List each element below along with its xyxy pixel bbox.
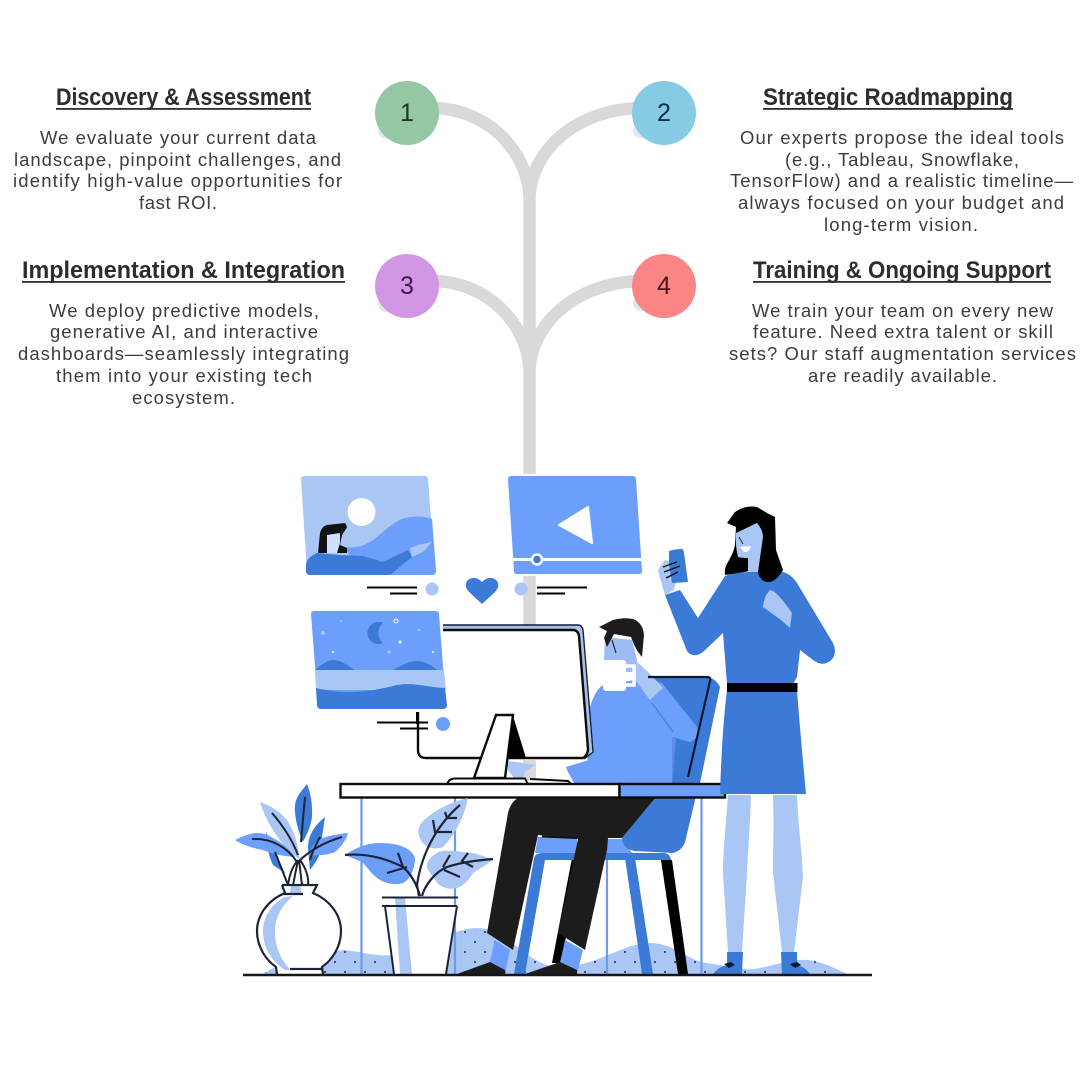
- caption marks: lower with dot: [377, 712, 450, 731]
- text block: Implementation & Integration: We deploy predictive models,: [49, 300, 319, 321]
- text block: Training & Ongoing Support: We train your team on every new: [752, 300, 1054, 321]
- text block: Implementation & Integration: them into your existing tech: [56, 365, 312, 386]
- step 1 number badge: 1: [400, 99, 414, 127]
- text block: Training & Ongoing Support: are readily available.: [808, 365, 997, 386]
- step 4 number badge: [632, 254, 696, 318]
- text block: Discovery & Assessment: Discovery & Assessment: [56, 84, 311, 111]
- text block: Strategic Roadmapping: long-term vision.: [824, 214, 978, 235]
- text block: Implementation & Integration: [18, 257, 349, 408]
- text block: Strategic Roadmapping: [730, 84, 1074, 235]
- caption marks: right with dot: [514, 582, 587, 596]
- text block: Training & Ongoing Support: [729, 257, 1076, 386]
- text block: Implementation & Integration: ecosystem.: [132, 387, 235, 408]
- text block: Implementation & Integration: Implementation & Integration: [22, 257, 345, 284]
- step 3 number badge: 3: [400, 272, 414, 300]
- illustration: desk: [340, 784, 725, 798]
- text block: Strategic Roadmapping: always focused on your budget and: [738, 192, 1064, 213]
- tree connector: [435, 108, 640, 780]
- illustration: vase plant: [235, 784, 348, 974]
- illustration: standing woman: [658, 507, 835, 974]
- text block: Implementation & Integration: dashboards—seamlessly integrating: [18, 343, 349, 364]
- video card: play button: [507, 475, 643, 575]
- step 2 number badge: [632, 81, 696, 145]
- text block: Discovery & Assessment: landscape, pinpoint challenges, and: [14, 149, 341, 170]
- illustration: monitor: [418, 625, 593, 778]
- text block: Discovery & Assessment: identify high-value opportunities for: [13, 170, 342, 191]
- night landscape card: [310, 610, 447, 709]
- icon: heart: [466, 578, 498, 604]
- text block: Strategic Roadmapping: Our experts propose the ideal tools: [740, 127, 1064, 148]
- illustration: floor line: [243, 974, 872, 976]
- illustration: chair back line: [648, 677, 710, 777]
- text block: Implementation & Integration: generative AI, and interactive: [50, 321, 318, 342]
- text block: Training & Ongoing Support: feature. Need extra talent or skill: [753, 321, 1053, 342]
- step 4 number badge: 4: [657, 272, 671, 300]
- text block: Strategic Roadmapping: Strategic Roadmapping: [763, 84, 1013, 111]
- text block: Discovery & Assessment: fast ROI.: [139, 192, 217, 213]
- step 1 number badge: [375, 81, 439, 145]
- text block: Strategic Roadmapping: TensorFlow) and a realistic timeline—: [730, 170, 1074, 191]
- text block: Discovery & Assessment: We evaluate your current data: [40, 127, 317, 148]
- illustration: desk legs: [362, 798, 702, 975]
- text block: Training & Ongoing Support: Training & Ongoing Support: [753, 257, 1051, 284]
- caption marks: left with dot: [367, 582, 438, 596]
- step 2 number badge: 2: [657, 99, 671, 127]
- illustration: seated man: [457, 618, 698, 974]
- illustration: ground blobs: [263, 928, 847, 974]
- text block: Discovery & Assessment: [13, 84, 342, 213]
- illustration: chair: [514, 677, 720, 974]
- illustration: keyboard and hand: [447, 760, 589, 784]
- image card: woman and landscape: [300, 475, 436, 575]
- step 3 number badge: [375, 254, 439, 318]
- text block: Strategic Roadmapping: (e.g., Tableau, Snowflake,: [785, 149, 1019, 170]
- illustration: potted plant: [345, 798, 493, 974]
- text block: Training & Ongoing Support: sets? Our staff augmentation services: [729, 343, 1076, 364]
